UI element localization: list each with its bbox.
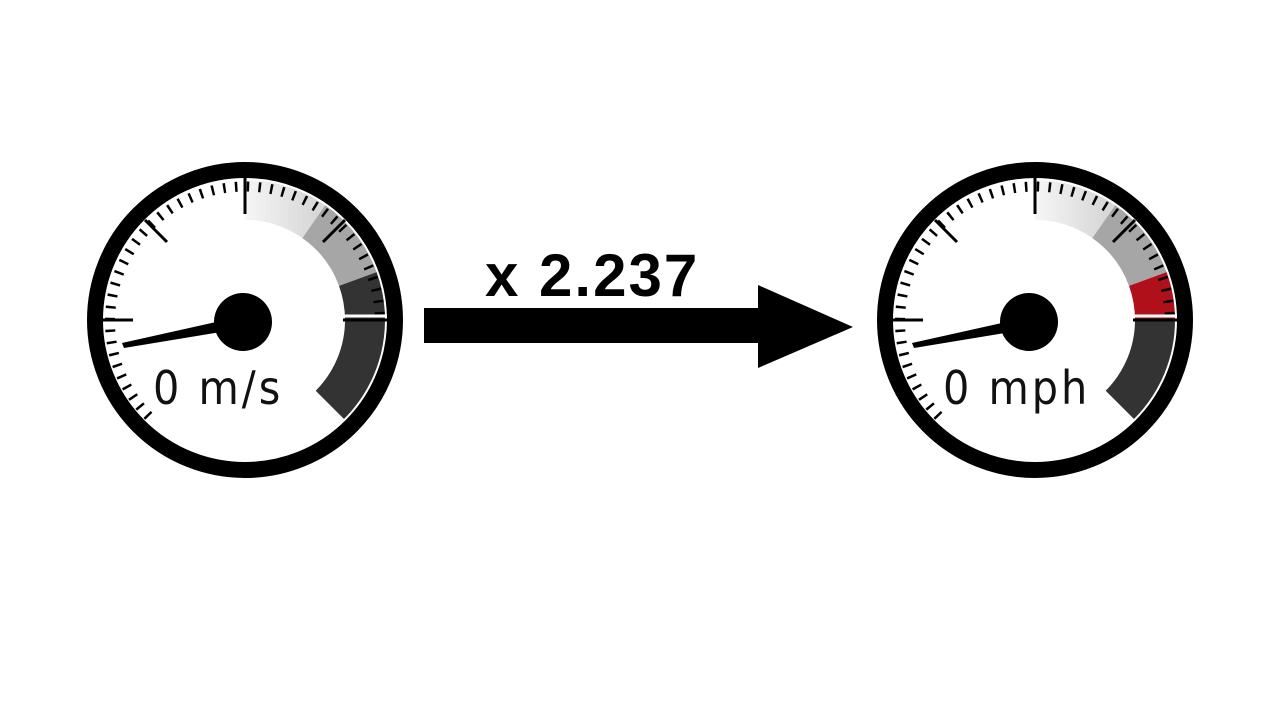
gauge: mph: 0 mph [943,361,1090,415]
arrow [424,285,853,368]
label: x 2.237: x 2.237 [485,242,699,309]
gauge: m/s [95,170,395,470]
gauge: mph [885,170,1185,470]
gauge: m/s: 0 m/s [153,361,283,415]
